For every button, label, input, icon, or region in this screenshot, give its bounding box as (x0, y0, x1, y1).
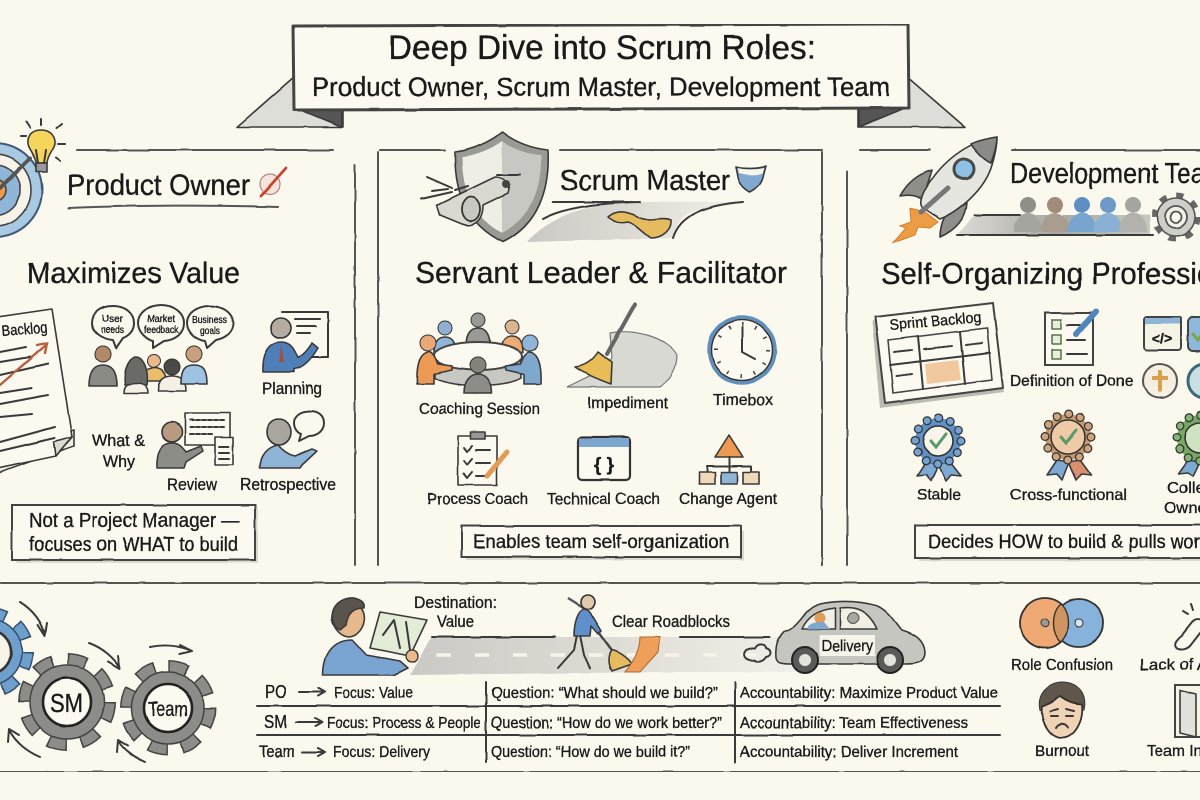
ribbon tail left (237, 76, 343, 127)
panel: Development Team (872, 137, 1200, 561)
row: PO: Focus: Value (334, 685, 413, 702)
ribbon fold left (296, 108, 342, 127)
row: PO: Question: “What should we build?” (491, 685, 718, 702)
label: Cross-functional: Cross-functional (1010, 487, 1127, 504)
icon: stakeholder group (89, 346, 207, 393)
label: Coaching Session: Coaching Session (419, 401, 540, 418)
icon: broken chain (1175, 604, 1200, 649)
callout: not a project manager (12, 505, 258, 563)
row: Team: Accountability: Deliver Increment (740, 744, 959, 761)
icon: small gear (1155, 196, 1197, 238)
icon: collective ownership badge (1177, 415, 1200, 476)
row: SM: Question: “How do we work better?” (491, 715, 722, 732)
icon: cross-functional badge (1045, 414, 1091, 480)
row: Team (259, 742, 959, 761)
row: SM: SM (264, 712, 287, 732)
ribbon tail right (858, 76, 965, 127)
gear: SM (25, 660, 109, 744)
comparison table (257, 682, 1000, 762)
roadmap illustration (323, 593, 925, 675)
icon: change agent org chart (699, 435, 759, 484)
gear: SM: SM (50, 688, 83, 718)
title banner (237, 24, 965, 127)
row: Team: Team (259, 742, 295, 761)
icon: whistle (421, 175, 520, 225)
icon: burnout face (1039, 682, 1085, 738)
anti-patterns (1011, 598, 1200, 760)
subheading: Maximizes Value: Maximizes Value (27, 257, 240, 290)
callout: self-organization (462, 526, 744, 560)
icon: planning presenter (263, 312, 328, 372)
heading: Product Owner: Product Owner (67, 169, 250, 202)
speech bubbles: inputs: feedback (144, 325, 180, 336)
subheading: Servant Leader and Facilitator: Servant Leader & Facilitator (415, 255, 787, 290)
icon: sprint backlog board: Sprint Backlog (889, 309, 982, 334)
gear: Team (127, 667, 209, 749)
label: Destination Value: Value (437, 612, 474, 631)
road (410, 637, 800, 675)
icon: code window: </> (1152, 330, 1172, 346)
label: Destination Value (414, 593, 497, 631)
gear: PO (0, 614, 27, 690)
gear: Team: Team (148, 698, 188, 721)
icon: teal circle (1188, 364, 1200, 398)
icon: delivery car: Delivery (822, 638, 873, 655)
label: Retrospective: Retrospective (240, 475, 336, 494)
icon: impediment broom (567, 304, 677, 387)
panel: Product Owner (0, 119, 336, 563)
label: Definition of Done: Definition of Done (1010, 373, 1133, 390)
arrows: rotation (8, 602, 192, 762)
speech bubbles: inputs: goals (200, 325, 220, 337)
callout: decides how (915, 525, 1200, 561)
title line 1: Deep Dive into Scrum Roles: (388, 29, 816, 67)
icon: delivery car (776, 602, 925, 673)
label: What and Why: What & (92, 431, 146, 450)
label: Clear Roadblocks: Clear Roadblocks (612, 613, 730, 631)
row: SM: Focus: Process & People (327, 715, 481, 732)
icon: light bulb (21, 119, 65, 172)
speech bubbles: inputs: User (102, 313, 123, 325)
icon: sprint backlog board (872, 303, 1004, 408)
icon: tool circle (1143, 364, 1177, 398)
icon: red arrow in circle (260, 168, 286, 196)
callout: self-organization: Enables team self-organization (473, 532, 729, 553)
label: Planning: Planning (262, 379, 322, 398)
icon: retrospective person (260, 411, 324, 468)
label: What and Why: Why (103, 452, 135, 471)
icon: backlog document (0, 309, 74, 476)
road behind broom (527, 202, 743, 242)
icon: shield (455, 132, 548, 242)
label: Role Confusion: Role Confusion (1011, 657, 1113, 674)
heading: Scrum Master: Scrum Master (560, 165, 730, 197)
icon: stable badge (915, 418, 961, 481)
label: Timebox: Timebox (713, 392, 773, 409)
label: Burnout: Burnout (1035, 743, 1090, 760)
road under team (957, 215, 1150, 235)
icon: check tile (1188, 317, 1200, 351)
icon: technical coach window (578, 437, 630, 480)
ribbon fold right (859, 108, 905, 127)
bottom band: interlocking gears (0, 602, 209, 762)
row: SM: Accountability: Team Effectiveness (740, 715, 968, 732)
icon: small broom (608, 212, 671, 238)
icon: backlog document: Backlog (1, 319, 48, 340)
icon: small blue shield (736, 166, 766, 192)
speech bubbles: inputs: Business (192, 314, 227, 326)
icon: definition of done checklist (1045, 312, 1096, 365)
label: Stable: Stable (917, 487, 961, 504)
icon: role confusion circles (1020, 598, 1103, 648)
title line 2: Product Owner, Scrum Master, Development Team (312, 72, 890, 102)
icon: target (0, 143, 42, 237)
icon: coaching session (417, 313, 541, 393)
label: Destination Value: Destination: (414, 593, 497, 612)
icon: person with map (323, 598, 427, 675)
row: PO (265, 682, 998, 702)
label: What and Why (92, 431, 146, 471)
label: Collective Ownership (1164, 480, 1200, 517)
icon: code window (1144, 317, 1181, 350)
icon: review presenter (157, 413, 233, 468)
label: Impediment: Impediment (587, 395, 669, 412)
icon: person sweeping (558, 595, 660, 672)
icon: technical coach window: { } (594, 455, 615, 476)
icon: team silhouettes (1014, 197, 1147, 232)
icon: timebox clock (709, 317, 775, 383)
row: PO: PO (265, 682, 287, 702)
label: Technical Coach: Technical Coach (547, 491, 660, 508)
speech bubbles: inputs (92, 305, 233, 348)
label: Process Coach: Process Coach (427, 491, 528, 508)
icon: process coach clipboard (458, 432, 507, 485)
banner panel (293, 24, 909, 110)
icon: door (1175, 685, 1200, 737)
icon: exhaust smoke (744, 644, 770, 662)
speech bubbles: inputs: Market (147, 314, 175, 325)
panel frames (0, 150, 1200, 772)
label: Review: Review (167, 475, 218, 494)
row: Team: Focus: Delivery (333, 744, 430, 761)
callout: not a project manager: Not a Project Manager — (29, 510, 240, 532)
panel: Scrum Master (415, 132, 787, 560)
callout: not a project manager: focuses on WHAT to build (29, 534, 238, 556)
row: Team: Question: “How do we build it?” (491, 744, 690, 761)
row: SM (264, 712, 968, 732)
label: Change Agent: Change Agent (679, 491, 778, 508)
speech bubbles: inputs: needs (101, 324, 124, 336)
icon: rocket (893, 137, 997, 243)
row: PO: Accountability: Maximize Product Value (740, 685, 998, 702)
